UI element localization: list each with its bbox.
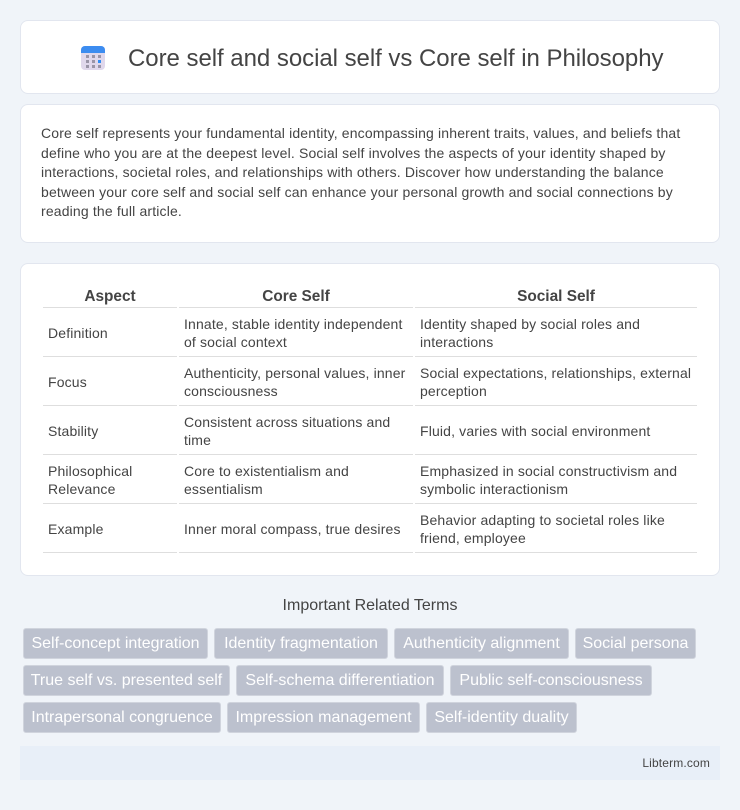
description text: between your core self and social self can enhance your personal growth and social connections by xyxy=(41,184,673,200)
tag xyxy=(214,628,388,659)
tag: True self vs. presented self xyxy=(31,672,222,689)
row: philosophical relevance: Core to existentialism and xyxy=(184,463,349,479)
related term tags xyxy=(23,628,696,733)
tag xyxy=(450,665,652,696)
row: focus: Authenticity, personal values, inner xyxy=(184,365,405,381)
row: example: Example xyxy=(48,521,104,537)
description text: define who you are at the deepest level. Social self involves the aspects of your identity shaped by xyxy=(41,145,666,161)
related terms heading: Important Related Terms xyxy=(283,597,457,614)
tag: Social persona xyxy=(583,635,688,652)
comparison table xyxy=(43,288,697,553)
tag: Public self-consciousness xyxy=(459,672,643,689)
header panel xyxy=(20,20,720,94)
row: philosophical relevance: Philosophical xyxy=(48,463,132,479)
row: stability: Fluid, varies with social environment xyxy=(420,423,650,439)
row: definition xyxy=(48,316,640,350)
footer bar xyxy=(20,746,720,780)
tag: Self-schema differentiation xyxy=(245,672,435,689)
row: philosophical relevance: symbolic interactionism xyxy=(420,481,568,497)
tag xyxy=(23,702,221,733)
tag xyxy=(426,702,577,733)
tag xyxy=(575,628,696,659)
table header xyxy=(84,288,595,305)
tag xyxy=(23,628,208,659)
row: stability: Consistent across situations and xyxy=(184,414,390,430)
tag: Self-identity duality xyxy=(434,709,569,726)
row: example: Inner moral compass, true desires xyxy=(184,521,401,537)
description text: reading the full article. xyxy=(41,203,182,219)
row: stability xyxy=(48,414,650,448)
row: stability: Stability xyxy=(48,423,98,439)
tag: Intrapersonal congruence xyxy=(31,709,213,726)
title: Core self and social self vs Core self in Philosophy xyxy=(128,45,664,72)
row: definition: Innate, stable identity independent xyxy=(184,316,403,332)
row: example: friend, employee xyxy=(420,530,526,546)
footer credit: Libterm.com xyxy=(642,756,710,770)
table header: Core Self xyxy=(262,288,330,305)
row: focus xyxy=(48,365,691,399)
table header: Aspect xyxy=(84,288,136,305)
tag: Self-concept integration xyxy=(31,635,200,652)
row: stability: time xyxy=(184,432,211,448)
comparison table panel xyxy=(20,263,720,576)
row: focus: consciousness xyxy=(184,383,278,399)
tag: Impression management xyxy=(235,709,412,726)
row: philosophical relevance: Relevance xyxy=(48,481,116,497)
row: focus: Focus xyxy=(48,374,87,390)
row: definition: of social context xyxy=(184,334,287,350)
row: definition: interactions xyxy=(420,334,493,350)
tag xyxy=(227,702,420,733)
row: definition: Identity shaped by social roles and xyxy=(420,316,640,332)
description text xyxy=(41,125,680,219)
row: example xyxy=(48,512,665,546)
description text: interactions, societal roles, and relationships with others. Discover how understanding the balance xyxy=(41,164,664,180)
tag xyxy=(23,665,230,696)
row: philosophical relevance: essentialism xyxy=(184,481,263,497)
tag: Authenticity alignment xyxy=(403,635,560,652)
row: definition: Definition xyxy=(48,325,108,341)
row: philosophical relevance: Emphasized in social constructivism and xyxy=(420,463,677,479)
row: example: Behavior adapting to societal roles like xyxy=(420,512,665,528)
description panel xyxy=(20,104,720,243)
tag xyxy=(236,665,444,696)
tag xyxy=(394,628,569,659)
table header: Social Self xyxy=(517,288,595,305)
row: focus: perception xyxy=(420,383,487,399)
row: focus: Social expectations, relationships, external xyxy=(420,365,691,381)
tag: Identity fragmentation xyxy=(224,635,378,652)
icon: calendar xyxy=(81,46,105,70)
description text: Core self represents your fundamental identity, encompassing inherent traits, values, and beliefs that xyxy=(41,125,680,141)
row: philosophical relevance xyxy=(48,463,677,497)
